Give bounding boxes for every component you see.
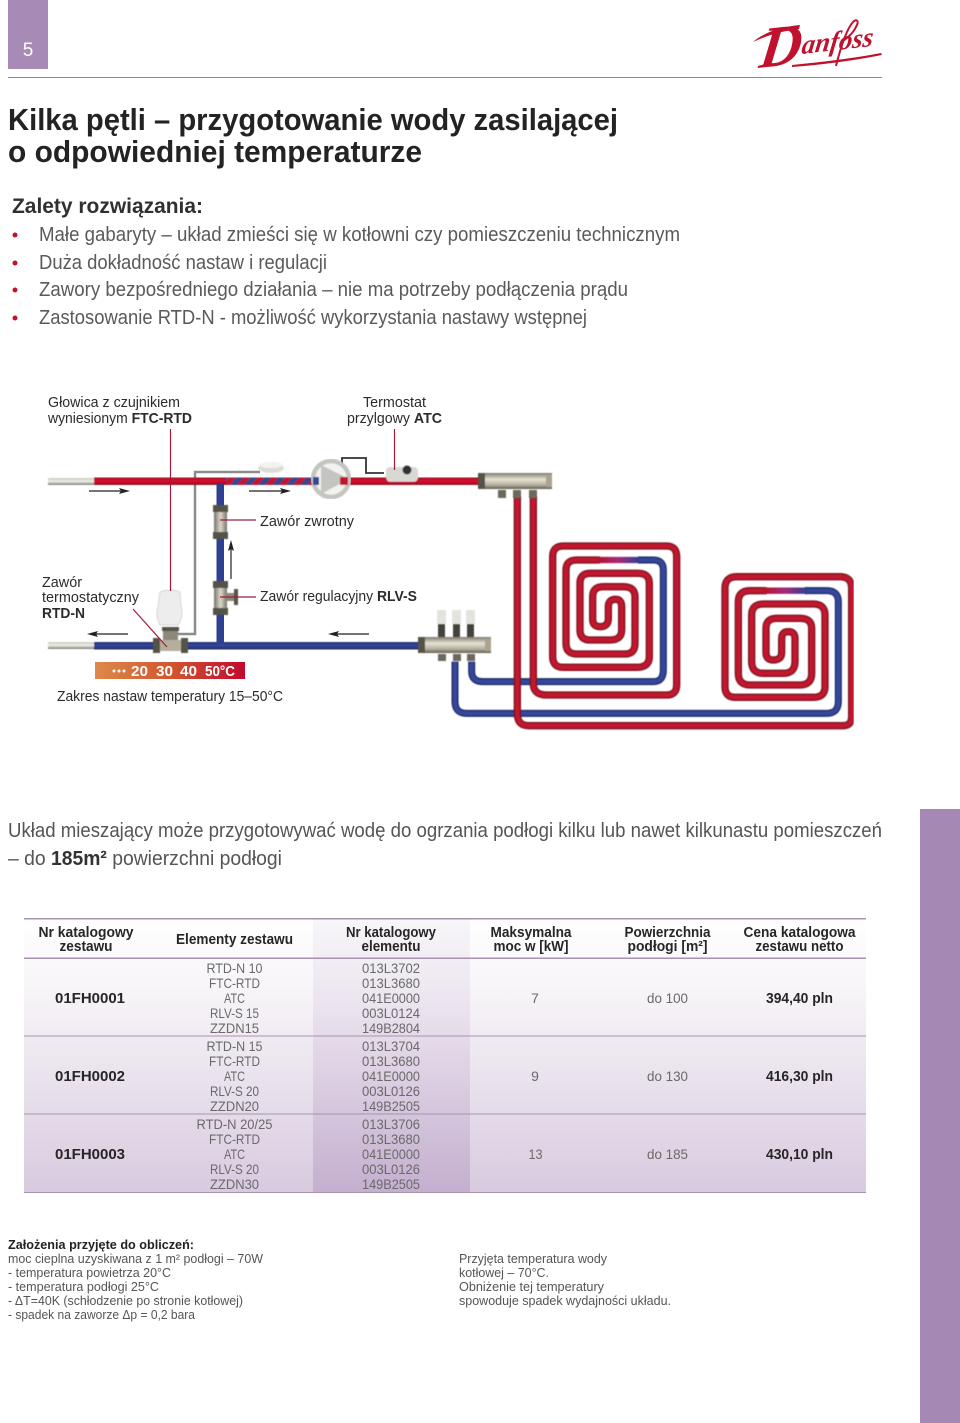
row 01FH0003: RTD-N 20/25 xyxy=(196,1116,273,1132)
title: Kilka pętli – przygotowanie wody zasilającej xyxy=(8,102,618,137)
supply temperature note: Przyjęta temperatura wody xyxy=(459,1251,607,1266)
red loop 1 xyxy=(533,497,677,695)
check valve xyxy=(213,505,228,539)
benefits heading: Zalety rozwiązania: xyxy=(12,194,203,218)
row 01FH0003 xyxy=(55,1116,833,1192)
valve labels: Zawór regulacyjny RLV-S xyxy=(260,588,417,605)
row 01FH0001: RTD-N 10 xyxy=(206,960,263,976)
bullets xyxy=(12,232,18,320)
row 01FH0003: 013L3680 xyxy=(362,1131,420,1147)
row 01FH0001: RLV-S 15 xyxy=(210,1005,259,1021)
circulation pump xyxy=(313,458,384,497)
row 01FH0001: 149B2804 xyxy=(362,1020,420,1036)
row 01FH0003: RLV-S 20 xyxy=(210,1161,259,1177)
row 01FH0003: 430,10 pln xyxy=(766,1146,833,1163)
table background xyxy=(24,918,866,1192)
benefit lines: Małe gabaryty – układ zmieści się w kotłowni czy pomieszczeniu technicznym xyxy=(39,224,680,246)
return pipe xyxy=(48,642,420,650)
red loop 2 xyxy=(517,497,852,726)
calculation assumptions: Założenia przyjęte do obliczeń: xyxy=(8,1237,194,1252)
product table xyxy=(24,918,866,1193)
Danfoss logo: D xyxy=(755,11,807,81)
Danfoss logo xyxy=(753,3,882,81)
thermostatic valve RTD-N xyxy=(153,590,188,653)
supply manifold xyxy=(478,473,552,498)
temperature range caption: Zakres nastaw temperatury 15–50°C xyxy=(57,688,283,705)
flow arrows xyxy=(87,488,369,637)
gray capillary tube xyxy=(176,472,260,634)
valve labels: termostatyczny xyxy=(42,589,139,606)
benefit lines: Zastosowanie RTD-N - możliwość wykorzystania nastawy wstępnej xyxy=(39,307,587,329)
temperature scale: 50°C xyxy=(205,664,235,680)
row 01FH0002: 041E0000 xyxy=(362,1068,420,1084)
row 01FH0002: ZZDN20 xyxy=(210,1098,259,1114)
row 01FH0001: 01FH0001 xyxy=(55,990,125,1007)
table header: Elementy zestawu xyxy=(176,932,293,948)
row 01FH0001: ZZDN15 xyxy=(210,1020,259,1036)
blue return pipes xyxy=(455,560,838,713)
table header xyxy=(38,925,856,955)
supply pipe xyxy=(48,478,480,485)
description paragraph: Układ mieszający może przygotowywać wodę do ogrzania podłogi kilku lub nawet kilkunastu pomieszczeń xyxy=(8,819,882,842)
callout labels above the pipes: przylgowy ATC xyxy=(347,410,442,427)
row 01FH0002: 9 xyxy=(531,1068,539,1084)
row 01FH0003: do 185 xyxy=(647,1146,688,1162)
calculation assumptions: - temperatura powietrza 20°C xyxy=(8,1265,171,1280)
capillary sensor xyxy=(258,462,284,473)
row 01FH0002: RLV-S 20 xyxy=(210,1083,259,1099)
description paragraph xyxy=(8,819,882,870)
row 01FH0003: 041E0000 xyxy=(362,1146,420,1162)
row 01FH0002: 416,30 pln xyxy=(766,1068,833,1085)
ATC thermostat xyxy=(386,466,418,482)
row 01FH0001: 041E0000 xyxy=(362,990,420,1006)
row 01FH0002: 149B2505 xyxy=(362,1098,420,1114)
row 01FH0001: ATC xyxy=(224,990,245,1006)
row 01FH0002: 013L3680 xyxy=(362,1053,420,1069)
callout labels above the pipes xyxy=(47,394,442,427)
table header: zestawu xyxy=(60,939,112,955)
table header: Cena katalogowa xyxy=(744,925,856,941)
row 01FH0001 xyxy=(55,960,833,1036)
row 01FH0002: do 130 xyxy=(647,1068,688,1084)
row 01FH0001: FTC-RTD xyxy=(209,975,260,991)
row 01FH0002: ATC xyxy=(224,1068,245,1084)
Danfoss logo: anfoss xyxy=(800,22,876,60)
table header: podłogi [m²] xyxy=(628,939,708,955)
row 01FH0003: 003L0126 xyxy=(362,1161,420,1177)
row 01FH0002 xyxy=(55,1038,833,1114)
row 01FH0001: 7 xyxy=(531,990,539,1006)
table rules xyxy=(24,918,866,1193)
benefit lines: Zawory bezpośredniego działania – nie ma potrzeby podłączenia prądu xyxy=(39,279,628,301)
row 01FH0003: FTC-RTD xyxy=(209,1131,260,1147)
header rule xyxy=(8,77,882,78)
row 01FH0001: 394,40 pln xyxy=(766,990,833,1007)
supply temperature note: Obniżenie tej temperatury xyxy=(459,1279,604,1294)
valve labels: RTD-N xyxy=(42,605,85,622)
benefit lines xyxy=(39,224,680,329)
temperature scale: 30 xyxy=(156,664,173,680)
title xyxy=(8,102,618,169)
callout labels above the pipes: Głowica z czujnikiem xyxy=(48,394,180,411)
row 01FH0003: 13 xyxy=(528,1146,543,1162)
calculation assumptions: - temperatura podłogi 25°C xyxy=(8,1279,159,1294)
supply temperature note: kotłowej – 70°C. xyxy=(459,1265,549,1280)
calculation assumptions xyxy=(8,1237,264,1322)
leader lines xyxy=(133,429,394,647)
row 01FH0001: 013L3702 xyxy=(362,960,420,976)
row 01FH0002: 013L3704 xyxy=(362,1038,420,1054)
table header: elementu xyxy=(362,939,420,955)
page number tab: 5 xyxy=(23,40,33,61)
row 01FH0002: 01FH0002 xyxy=(55,1068,125,1085)
floor heating loops xyxy=(455,497,852,726)
table header: Nr katalogowy xyxy=(38,925,134,941)
table header: Powierzchnia xyxy=(624,925,711,941)
valve labels xyxy=(42,513,417,622)
row 01FH0001: 013L3680 xyxy=(362,975,420,991)
regulating valve RLV-S xyxy=(213,581,238,615)
return manifold with valve heads xyxy=(418,610,491,661)
supply temperature note: spowoduje spadek wydajności układu. xyxy=(459,1293,671,1308)
row 01FH0003: 013L3706 xyxy=(362,1116,420,1132)
supply temperature note xyxy=(459,1251,671,1308)
row 01FH0001: do 100 xyxy=(647,990,688,1006)
calculation assumptions: - ΔT=40K (schłodzenie po stronie kotłowej) xyxy=(8,1293,243,1308)
callout labels above the pipes: Termostat xyxy=(363,394,427,411)
temperature scale: 20 xyxy=(131,664,148,680)
row 01FH0002: FTC-RTD xyxy=(209,1053,260,1069)
calculation assumptions: moc cieplna uzyskiwana z 1 m² podłogi – 70W xyxy=(8,1251,264,1266)
benefits list xyxy=(12,194,680,329)
table header: zestawu netto xyxy=(756,939,844,955)
benefit lines: Duża dokładność nastaw i regulacji xyxy=(39,252,327,274)
row 01FH0002: 003L0126 xyxy=(362,1083,420,1099)
table header: Nr katalogowy xyxy=(346,925,436,941)
calculation assumptions: - spadek na zaworze Δp = 0,2 bara xyxy=(8,1307,196,1322)
valve labels: Zawór xyxy=(42,574,82,591)
row 01FH0003: 149B2505 xyxy=(362,1176,420,1192)
bypass pipe xyxy=(216,484,224,644)
temperature scale: 40 xyxy=(180,664,197,680)
table header: moc w [kW] xyxy=(494,939,569,955)
row 01FH0002: RTD-N 15 xyxy=(206,1038,263,1054)
row 01FH0001: 003L0124 xyxy=(362,1005,420,1021)
temperature scale xyxy=(95,662,245,680)
row 01FH0003: 01FH0003 xyxy=(55,1146,125,1163)
table header: Maksymalna xyxy=(490,925,572,941)
callout labels above the pipes: wyniesionym FTC-RTD xyxy=(47,410,192,427)
row 01FH0003: ZZDN30 xyxy=(210,1176,259,1192)
valve labels: Zawór zwrotny xyxy=(260,513,354,530)
side band xyxy=(920,809,960,1423)
title: o odpowiedniej temperaturze xyxy=(8,134,422,169)
description paragraph: – do 185m² powierzchni podłogi xyxy=(8,847,282,870)
row 01FH0003: ATC xyxy=(224,1146,245,1162)
page number tab xyxy=(8,0,48,69)
hydraulic diagram xyxy=(42,394,852,726)
